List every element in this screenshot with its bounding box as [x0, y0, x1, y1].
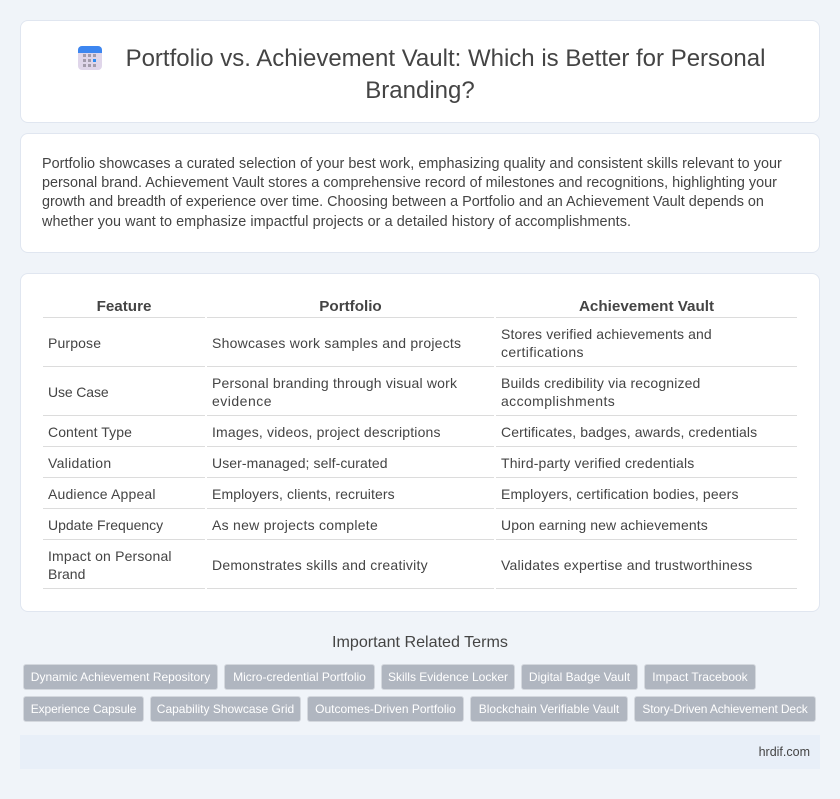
tag	[307, 696, 464, 722]
panel: comparison table: Certificates, badges, awards, credentials	[501, 424, 757, 440]
panel: comparison table: Images, videos, project descriptions	[212, 424, 441, 440]
footer source text: hrdif.com	[759, 745, 810, 759]
row: impact on personal brand	[48, 548, 172, 582]
panel: comparison table: evidence	[212, 393, 272, 409]
text block: introduction: whether you want to emphasize impactful projects or a detailed history of accomplishments.	[42, 214, 631, 230]
title	[126, 45, 765, 104]
row: validation: Validation	[48, 455, 111, 471]
tag: Capability Showcase Grid	[157, 702, 294, 716]
row: impact on personal brand: Brand	[48, 566, 85, 582]
tag: Blockchain Verifiable Vault	[479, 702, 619, 716]
panel: comparison table: Demonstrates skills and creativity	[212, 557, 428, 573]
tag: Story-Driven Achievement Deck	[642, 702, 808, 716]
tag	[634, 696, 816, 722]
text block: introduction: personal brand. Achievement Vault stores a comprehensive record of milestones and recognitions, highlighting your	[42, 175, 777, 191]
tag: Impact Tracebook	[652, 670, 748, 684]
panel: comparison table: As new projects complete	[212, 517, 378, 533]
tag	[224, 664, 375, 690]
row: content type: Content Type	[48, 424, 132, 440]
panel: comparison table	[20, 273, 820, 612]
tag	[150, 696, 301, 722]
panel: comparison table: certifications	[501, 344, 584, 360]
table header: feature: Feature	[97, 298, 151, 315]
panel: introduction	[20, 133, 820, 253]
row: impact on personal brand: Impact on Personal	[48, 548, 172, 564]
panel: comparison table: Third-party verified credentials	[501, 455, 694, 471]
text block: introduction: growth and breadth of experience over time. Choosing between a Portfolio and an Achievement Vault depends on	[42, 194, 764, 210]
panel: comparison table: Validates expertise and trustworthiness	[501, 557, 753, 573]
panel: comparison table: Employers, certification bodies, peers	[501, 486, 739, 502]
tag	[23, 664, 218, 690]
panel: comparison table: accomplishments	[501, 393, 615, 409]
panel: comparison table: Upon earning new achievements	[501, 517, 708, 533]
tag	[381, 664, 515, 690]
title: Portfolio vs. Achievement Vault: Which is Better for Personal	[126, 45, 765, 72]
title: Branding?	[365, 77, 475, 104]
panel: comparison table: Stores verified achievements and	[501, 326, 712, 342]
tag: Dynamic Achievement Repository	[31, 670, 210, 684]
tag: Experience Capsule	[31, 702, 136, 716]
panel: comparison table: Employers, clients, recruiters	[212, 486, 395, 502]
panel: comparison table: Showcases work samples and projects	[212, 335, 461, 351]
footer bar	[20, 735, 820, 769]
row: use case: Use Case	[48, 384, 109, 400]
tag	[521, 664, 638, 690]
icon: calendar	[78, 46, 102, 70]
tag	[23, 696, 144, 722]
panel: comparison table: Builds credibility via recognized	[501, 375, 700, 391]
row: audience appeal: Audience Appeal	[48, 486, 156, 502]
panel: comparison table: Personal branding through visual work	[212, 375, 457, 391]
table header: achievement vault: Achievement Vault	[579, 298, 714, 315]
panel: header	[20, 20, 820, 123]
text block: introduction	[42, 156, 782, 230]
tag: Outcomes-Driven Portfolio	[315, 702, 456, 716]
tag	[644, 664, 756, 690]
text block: introduction: Portfolio showcases a curated selection of your best work, emphasizing quality and consistent skills relevant to your	[42, 156, 782, 172]
tag	[470, 696, 628, 722]
heading: important related terms: Important Related Terms	[332, 633, 508, 651]
tag group: related terms	[23, 664, 816, 722]
panel: comparison table: User-managed; self-curated	[212, 455, 388, 471]
tag: Digital Badge Vault	[529, 670, 630, 684]
row: update frequency: Update Frequency	[48, 517, 163, 533]
row: purpose: Purpose	[48, 335, 101, 351]
tag: Skills Evidence Locker	[388, 670, 508, 684]
tag: Micro-credential Portfolio	[233, 670, 366, 684]
table header: portfolio: Portfolio	[319, 298, 382, 315]
